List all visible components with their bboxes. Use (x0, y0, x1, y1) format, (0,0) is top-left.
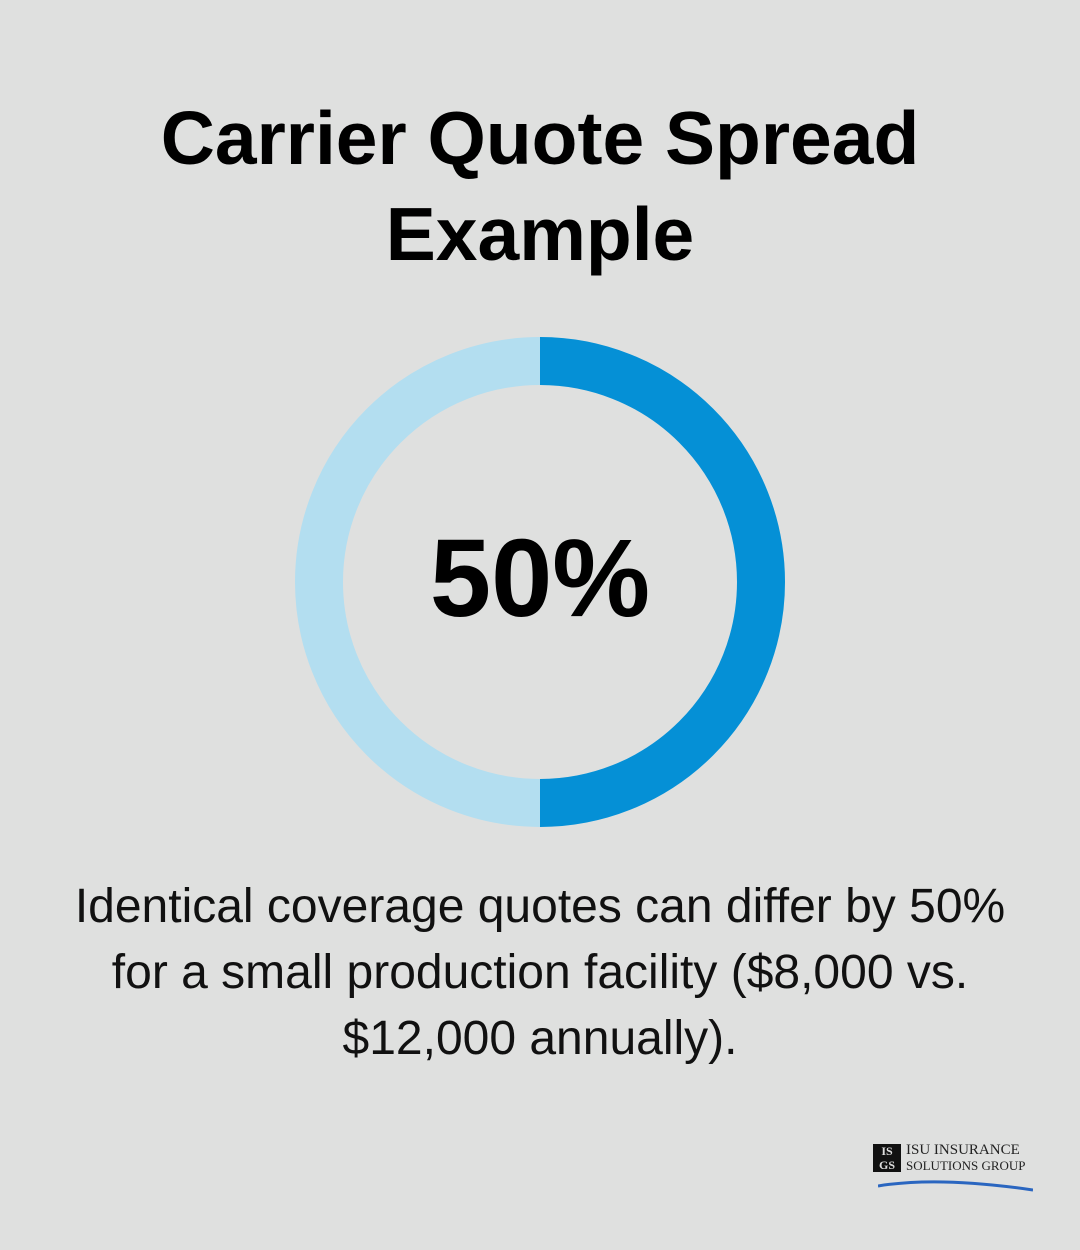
description text (75, 880, 1005, 1065)
description text: for a small production facility ($8,000 vs. (112, 946, 968, 999)
title: Carrier Quote Spread (161, 96, 919, 180)
title (161, 96, 919, 276)
description text: Identical coverage quotes can differ by 50% (75, 880, 1005, 933)
logo text: SOLUTIONS GROUP (906, 1158, 1026, 1173)
logo mark (873, 1144, 901, 1172)
ring: 50% segment (540, 361, 761, 803)
logo (873, 1142, 1033, 1192)
logo mark: GS (879, 1158, 895, 1172)
logo swoosh (878, 1180, 1033, 1192)
description text: $12,000 annually). (343, 1012, 737, 1065)
ring: background (319, 361, 761, 803)
logo mark: IS (881, 1144, 893, 1158)
logo text: ISU INSURANCE (906, 1142, 1020, 1158)
title: Example (386, 192, 694, 276)
logo text (906, 1142, 1026, 1173)
center value: 50% (430, 517, 650, 640)
